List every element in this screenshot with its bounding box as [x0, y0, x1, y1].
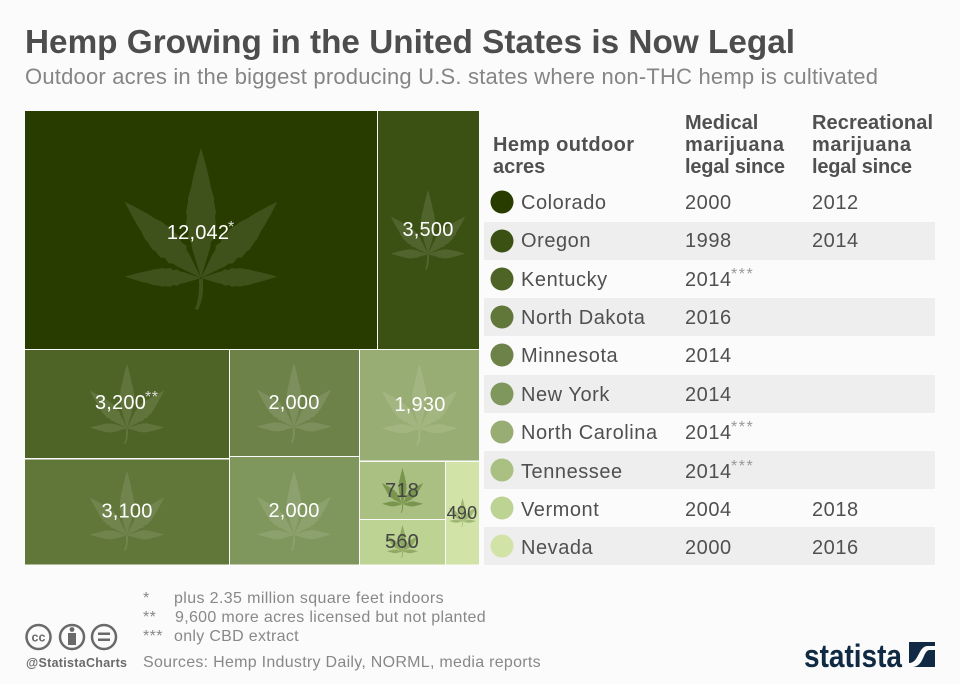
table header: Hemp outdoor	[493, 134, 634, 156]
table header	[493, 112, 933, 178]
table header: legal since	[812, 156, 912, 178]
table header: acres	[493, 156, 545, 178]
table header: marijuana	[685, 134, 785, 156]
row: North Dakota	[484, 298, 935, 336]
row: North Carolina	[490, 419, 754, 444]
panel: Kentucky 3,200	[25, 350, 229, 458]
row: Tennessee: ***	[731, 458, 754, 475]
row: New York: 2014	[685, 384, 732, 406]
title: Hemp Growing in the United States is Now Legal	[25, 24, 795, 61]
panel: Tennessee 718: 718	[385, 480, 419, 502]
row: Oregon: Oregon	[521, 230, 591, 252]
subtitle: Outdoor acres in the biggest producing U.S. states where non-THC hemp is cultivated	[25, 64, 878, 89]
panel: Kentucky 3,200: **	[145, 389, 158, 406]
panel: Vermont 560	[360, 520, 445, 564]
row: Minnesota: 2014	[685, 345, 732, 367]
row: Nevada: 2000	[685, 537, 732, 559]
row: North Dakota: North Dakota	[521, 307, 646, 329]
row: Vermont: 2018	[812, 499, 859, 521]
row: Nevada: 2016	[812, 537, 859, 559]
row: Tennessee	[484, 451, 935, 489]
row: Nevada	[484, 527, 935, 565]
row: Minnesota: Minnesota	[521, 345, 619, 367]
panel: Vermont 560: 560	[385, 531, 419, 553]
table header: Recreational	[812, 112, 933, 134]
row: New York	[484, 375, 935, 413]
row: Vermont: Vermont	[521, 499, 599, 521]
panel: Oregon 3,500: 3,500	[402, 219, 454, 241]
row: North Dakota: 2016	[685, 307, 732, 329]
panel: Nevada 490	[446, 462, 479, 564]
panel: North Dakota 3,100: 3,100	[101, 500, 153, 522]
row: Vermont	[490, 496, 859, 521]
row: Tennessee: Tennessee	[521, 461, 623, 483]
table rows	[484, 190, 935, 565]
row: Oregon: 2014	[812, 230, 859, 252]
row: Colorado	[490, 190, 859, 214]
icon: creative commons licence	[26, 625, 116, 649]
footnotes: plus 2.35 million square feet indoors	[174, 590, 444, 607]
handle: @StatistaCharts	[26, 656, 127, 670]
logo: statista: statista	[804, 638, 902, 674]
panel: Minnesota 2,000: 2,000	[268, 392, 320, 414]
panel: Kentucky 3,200: 3,200	[95, 392, 146, 414]
panel: North Dakota 3,100	[25, 460, 229, 564]
row: Vermont: 2004	[685, 499, 732, 521]
row: North Carolina: ***	[731, 419, 754, 436]
panel: Nevada 490: 490	[447, 503, 477, 523]
panel: Colorado 12,042	[25, 111, 377, 349]
icon: creative commons licence: cc	[32, 630, 45, 644]
footnotes: ***	[143, 628, 163, 645]
row: Nevada: Nevada	[521, 537, 594, 559]
footnotes: **	[143, 609, 156, 626]
panel: New York 2,000: 2,000	[268, 500, 320, 522]
panel: North Carolina 1,930	[360, 350, 479, 460]
footnotes: 9,600 more acres licensed but not planted	[175, 609, 486, 626]
row: Colorado: 2000	[685, 192, 732, 214]
row: Colorado: 2012	[812, 192, 859, 214]
table header: legal since	[685, 156, 785, 178]
row: Minnesota	[490, 344, 732, 367]
row: Oregon	[484, 222, 935, 260]
panel: Colorado 12,042: 12,042	[167, 222, 229, 244]
table header: marijuana	[812, 134, 912, 156]
row: Kentucky: 2014	[685, 269, 732, 291]
treemap chart	[25, 111, 479, 564]
footnotes: *	[143, 590, 150, 607]
sources: Sources: Hemp Industry Daily, NORML, media reports	[143, 654, 541, 671]
icon: statista mark	[909, 642, 935, 667]
row: Oregon: 1998	[685, 230, 732, 252]
footnotes: only CBD extract	[174, 628, 299, 645]
panel: New York 2,000	[230, 457, 359, 564]
panel: Colorado 12,042: *	[228, 219, 235, 236]
panel: Minnesota 2,000	[230, 350, 359, 456]
row: North Carolina: 2014	[685, 422, 732, 444]
panel: Tennessee 718	[360, 462, 445, 519]
row: New York: New York	[521, 384, 610, 406]
panel: North Carolina 1,930: 1,930	[394, 394, 446, 416]
row: Kentucky: ***	[731, 266, 754, 283]
panel: Oregon 3,500	[378, 111, 479, 349]
row: Kentucky: Kentucky	[521, 269, 608, 291]
row: North Carolina: North Carolina	[521, 422, 658, 444]
footnotes	[143, 590, 486, 645]
row: Kentucky	[490, 266, 754, 291]
table header: Medical	[685, 112, 758, 134]
row: Colorado: Colorado	[521, 192, 607, 214]
row: Tennessee: 2014	[685, 461, 732, 483]
